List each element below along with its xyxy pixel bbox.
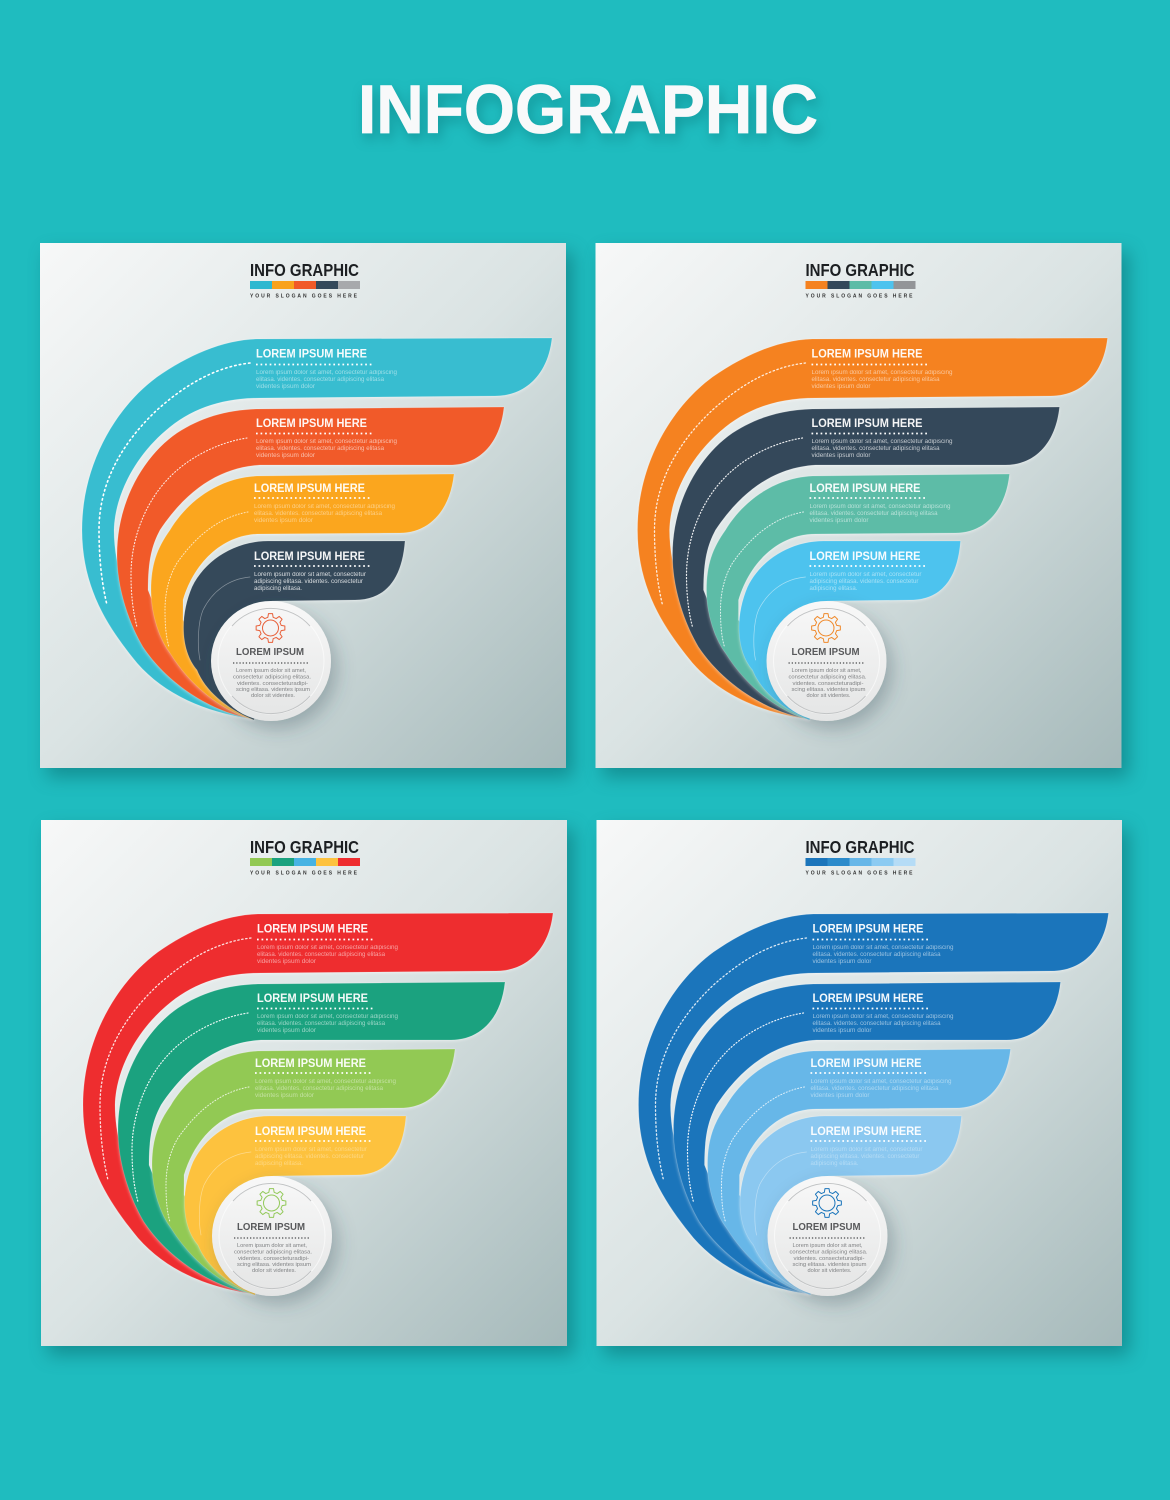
band 1: elitasa. videntes. consectetur adipiscing elitasa xyxy=(812,952,941,958)
icon: gear xyxy=(257,1189,286,1217)
panel heading xyxy=(806,837,916,876)
band 2: Lorem ipsum dolor sit amet, consectetur adipiscing xyxy=(812,1014,954,1020)
band 2: LOREM IPSUM HERE xyxy=(257,993,368,1005)
band 4: adipiscing elitasa. xyxy=(255,1161,303,1167)
band 3: Lorem ipsum dolor sit amet, consectetur adipiscing xyxy=(810,504,950,510)
band 3 xyxy=(706,474,1010,720)
band 1: videntes ipsum dolor xyxy=(812,384,870,390)
band 2: elitasa. videntes. consectetur adipiscing elitasa xyxy=(812,446,940,452)
panel heading: INFO GRAPHIC xyxy=(806,260,915,280)
band 1: Lorem ipsum dolor sit amet, consectetur adipiscing xyxy=(256,370,397,376)
band 1 xyxy=(638,913,1108,1294)
centre circle: videntes. consecteturadipi- xyxy=(237,681,308,687)
band 2: Lorem ipsum dolor sit amet, consectetur adipiscing xyxy=(256,439,397,445)
band 2: elitasa. videntes. consectetur adipiscing elitasa xyxy=(812,1021,941,1027)
icon: gear xyxy=(813,1189,841,1217)
panel background xyxy=(596,820,1122,1346)
band 2: Lorem ipsum dolor sit amet, consectetur adipiscing xyxy=(812,439,952,445)
centre circle: consectetur adipiscing elitasa. xyxy=(233,674,311,680)
centre circle: videntes. consecteturadipi- xyxy=(794,1256,865,1262)
band 3: Lorem ipsum dolor sit amet, consectetur adipiscing xyxy=(254,504,395,510)
centre circle: Lorem ipsum dolor sit amet, xyxy=(236,668,306,674)
band 4: adipiscing elitasa. videntes. consectetur xyxy=(255,1154,364,1160)
icon: gear xyxy=(812,614,840,642)
band 4: LOREM IPSUM HERE xyxy=(810,551,921,563)
centre circle: LOREM IPSUM xyxy=(792,1221,861,1233)
band 1: Lorem ipsum dolor sit amet, consectetur adipiscing xyxy=(812,945,954,951)
centre circle: dolor sit videntes. xyxy=(251,693,295,699)
band 1 xyxy=(638,338,1108,719)
panel: bottom left infographic xyxy=(41,820,567,1346)
centre circle: LOREM IPSUM xyxy=(792,646,860,658)
band 3: LOREM IPSUM HERE xyxy=(254,483,365,495)
panel heading: YOUR SLOGAN GOES HERE xyxy=(806,870,913,876)
band 2 xyxy=(672,407,1060,719)
panel heading: YOUR SLOGAN GOES HERE xyxy=(250,870,358,876)
panel background xyxy=(596,243,1122,768)
band 1: Lorem ipsum dolor sit amet, consectetur adipiscing xyxy=(812,370,952,376)
band 1: videntes ipsum dolor xyxy=(256,384,315,390)
centre circle: scing elitasa. videntes ipsum xyxy=(792,1262,867,1268)
band 2: Lorem ipsum dolor sit amet, consectetur adipiscing xyxy=(257,1014,398,1020)
centre circle: consectetur adipiscing elitasa. xyxy=(790,1250,868,1256)
panel: top left infographic xyxy=(40,243,566,768)
centre circle xyxy=(211,601,331,721)
band 2: videntes ipsum dolor xyxy=(812,453,870,459)
band 1: elitasa. videntes. consectetur adipiscing elitasa xyxy=(812,377,940,383)
band 1: LOREM IPSUM HERE xyxy=(812,348,923,360)
band 3 xyxy=(152,1049,455,1295)
centre circle xyxy=(212,1176,332,1296)
band 4: adipiscing elitasa. xyxy=(810,586,858,592)
panel heading xyxy=(806,260,916,300)
band 3: videntes ipsum dolor xyxy=(255,1093,314,1099)
panel heading: INFO GRAPHIC xyxy=(250,260,359,280)
band 1: videntes ipsum dolor xyxy=(812,959,872,965)
band 3: Lorem ipsum dolor sit amet, consectetur adipiscing xyxy=(255,1079,396,1085)
band 1: elitasa. videntes. consectetur adipiscing elitasa xyxy=(256,377,385,383)
band 3: elitasa. videntes. consectetur adipiscing elitasa xyxy=(810,511,938,517)
panel background xyxy=(40,243,566,768)
band 4: Lorem ipsum dolor sit amet, consectetur xyxy=(255,1147,367,1153)
centre circle: videntes. consecteturadipi- xyxy=(792,681,864,687)
band 1: LOREM IPSUM HERE xyxy=(812,924,924,936)
panel heading: YOUR SLOGAN GOES HERE xyxy=(806,294,913,300)
band 2: videntes ipsum dolor xyxy=(812,1028,872,1034)
band 4: Lorem ipsum dolor sit amet, consectetur xyxy=(810,572,922,578)
icon: gear xyxy=(256,614,285,642)
band 1: LOREM IPSUM HERE xyxy=(256,348,367,360)
centre circle xyxy=(766,601,886,721)
band 3: LOREM IPSUM HERE xyxy=(810,483,921,495)
band 1: Lorem ipsum dolor sit amet, consectetur adipiscing xyxy=(257,945,398,951)
band 3 xyxy=(708,1049,1010,1295)
band 2: elitasa. videntes. consectetur adipiscing elitasa xyxy=(256,446,385,452)
band 4: adipiscing elitasa. xyxy=(254,586,302,592)
band 4: adipiscing elitasa. xyxy=(810,1161,859,1167)
band 4: adipiscing elitasa. videntes. consectetur xyxy=(810,1154,920,1160)
centre circle: Lorem ipsum dolor sit amet, xyxy=(792,1243,863,1249)
band 3: elitasa. videntes. consectetur adipiscing elitasa xyxy=(810,1086,939,1092)
band 1: videntes ipsum dolor xyxy=(257,959,316,965)
band 2: LOREM IPSUM HERE xyxy=(812,993,924,1005)
centre circle: scing elitasa. videntes ipsum xyxy=(236,687,310,693)
centre circle xyxy=(768,1176,888,1296)
band 1: elitasa. videntes. consectetur adipiscing elitasa xyxy=(257,952,386,958)
band 4 xyxy=(740,1116,962,1295)
band 4: LOREM IPSUM HERE xyxy=(254,551,365,563)
band 1 xyxy=(82,338,552,719)
panel heading: YOUR SLOGAN GOES HERE xyxy=(250,294,358,300)
panel heading xyxy=(250,837,360,876)
centre circle: scing elitasa. videntes ipsum xyxy=(792,687,866,693)
band 2: videntes ipsum dolor xyxy=(257,1028,316,1034)
centre circle: LOREM IPSUM xyxy=(237,1221,305,1233)
band 3: videntes ipsum dolor xyxy=(810,518,868,524)
band 3: Lorem ipsum dolor sit amet, consectetur adipiscing xyxy=(810,1079,952,1085)
centre circle: LOREM IPSUM xyxy=(236,646,304,658)
band 3: videntes ipsum dolor xyxy=(810,1093,870,1099)
centre circle: consectetur adipiscing elitasa. xyxy=(788,674,867,680)
band 2: LOREM IPSUM HERE xyxy=(812,418,923,430)
band 2: LOREM IPSUM HERE xyxy=(256,418,367,430)
band 3: LOREM IPSUM HERE xyxy=(810,1058,922,1070)
centre circle: dolor sit videntes. xyxy=(808,1268,852,1274)
band 2: videntes ipsum dolor xyxy=(256,453,315,459)
centre circle: Lorem ipsum dolor sit amet, xyxy=(237,1243,307,1249)
band 4: LOREM IPSUM HERE xyxy=(255,1126,366,1138)
band 2 xyxy=(674,982,1060,1294)
band 4: adipiscing elitasa. videntes. consectetur xyxy=(254,579,363,585)
centre circle: consectetur adipiscing elitasa. xyxy=(234,1250,312,1256)
centre circle: scing elitasa. videntes ipsum xyxy=(237,1262,311,1268)
band 4 xyxy=(739,541,960,720)
centre circle: dolor sit videntes. xyxy=(252,1268,296,1274)
band 1: LOREM IPSUM HERE xyxy=(257,924,368,936)
band 4: Lorem ipsum dolor sit amet, consectetur xyxy=(810,1147,922,1153)
band 4: LOREM IPSUM HERE xyxy=(810,1126,922,1138)
band 1 xyxy=(83,913,553,1294)
centre circle: Lorem ipsum dolor sit amet, xyxy=(792,668,862,674)
band 3: videntes ipsum dolor xyxy=(254,518,313,524)
panel heading xyxy=(250,260,360,300)
panel: top right infographic xyxy=(596,243,1122,768)
panel heading: INFO GRAPHIC xyxy=(250,837,359,857)
band 4 xyxy=(185,1116,406,1295)
panel heading: INFO GRAPHIC xyxy=(806,837,915,857)
panel: bottom right infographic xyxy=(596,820,1122,1346)
band 3: elitasa. videntes. consectetur adipiscing elitasa xyxy=(254,511,383,517)
panel background xyxy=(41,820,567,1346)
band 3 xyxy=(151,474,454,720)
band 4: adipiscing elitasa. videntes. consectetur xyxy=(810,579,918,585)
centre circle: videntes. consecteturadipi- xyxy=(238,1256,309,1262)
band 2 xyxy=(117,407,504,719)
band 2 xyxy=(118,982,505,1294)
band 4: Lorem ipsum dolor sit amet, consectetur xyxy=(254,572,366,578)
centre circle: dolor sit videntes. xyxy=(806,693,851,699)
band 3: LOREM IPSUM HERE xyxy=(255,1058,366,1070)
band 3: elitasa. videntes. consectetur adipiscing elitasa xyxy=(255,1086,384,1092)
title: INFOGRAPHIC xyxy=(358,71,818,148)
band 2: elitasa. videntes. consectetur adipiscing elitasa xyxy=(257,1021,386,1027)
band 4 xyxy=(184,541,405,720)
